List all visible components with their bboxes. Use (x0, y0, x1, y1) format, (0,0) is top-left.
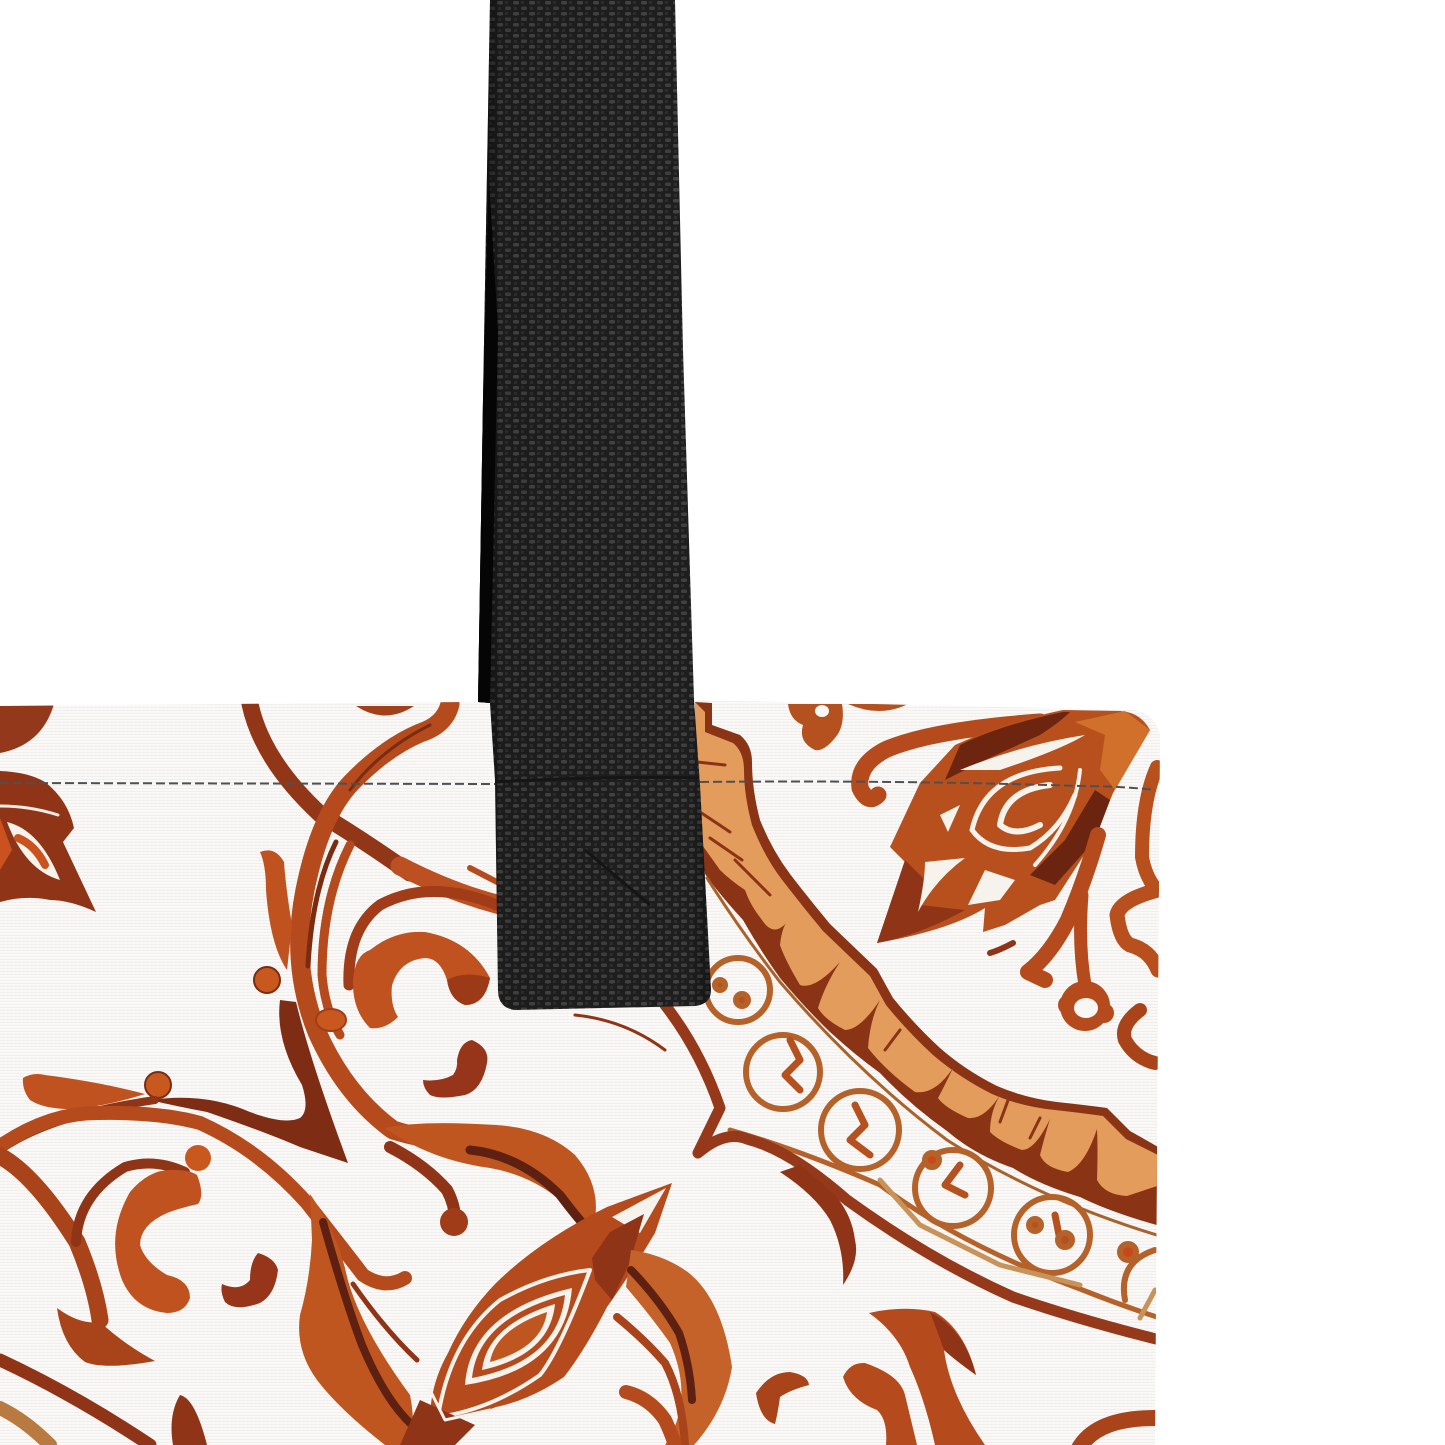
strap dark side shadow (478, 180, 498, 703)
medallion band: scrollwork ring (706, 878, 1160, 1318)
bottom commas (756, 1309, 1155, 1445)
upper-right flower (788, 704, 1150, 1031)
lower left vines (0, 1156, 207, 1445)
comma upper centre (423, 1040, 487, 1098)
stitching line (0, 782, 1155, 790)
right-edge scrolls (1117, 767, 1158, 1063)
crossing vines upper centre (250, 704, 500, 1141)
medallion band: outer dark outline and drop point (575, 1005, 1160, 1340)
left leaf (0, 771, 96, 912)
central flowing leaf (299, 1123, 596, 1445)
strap stitching (495, 778, 699, 905)
lotus bud motif bottom centre (400, 1183, 672, 1445)
ornamental floral print (0, 702, 1160, 1445)
right-hand leaf beside bud (617, 1250, 732, 1445)
dark wedge and horizontal stem (0, 1000, 405, 1283)
medallion band: orange scalloped border (695, 702, 1160, 1226)
scroll motif upper centre (254, 892, 497, 1031)
canvas fabric panel (0, 700, 1160, 1445)
black woven strap (478, 0, 711, 1010)
lower left scroll (115, 1145, 278, 1313)
top-left medallion fragment (0, 704, 54, 753)
